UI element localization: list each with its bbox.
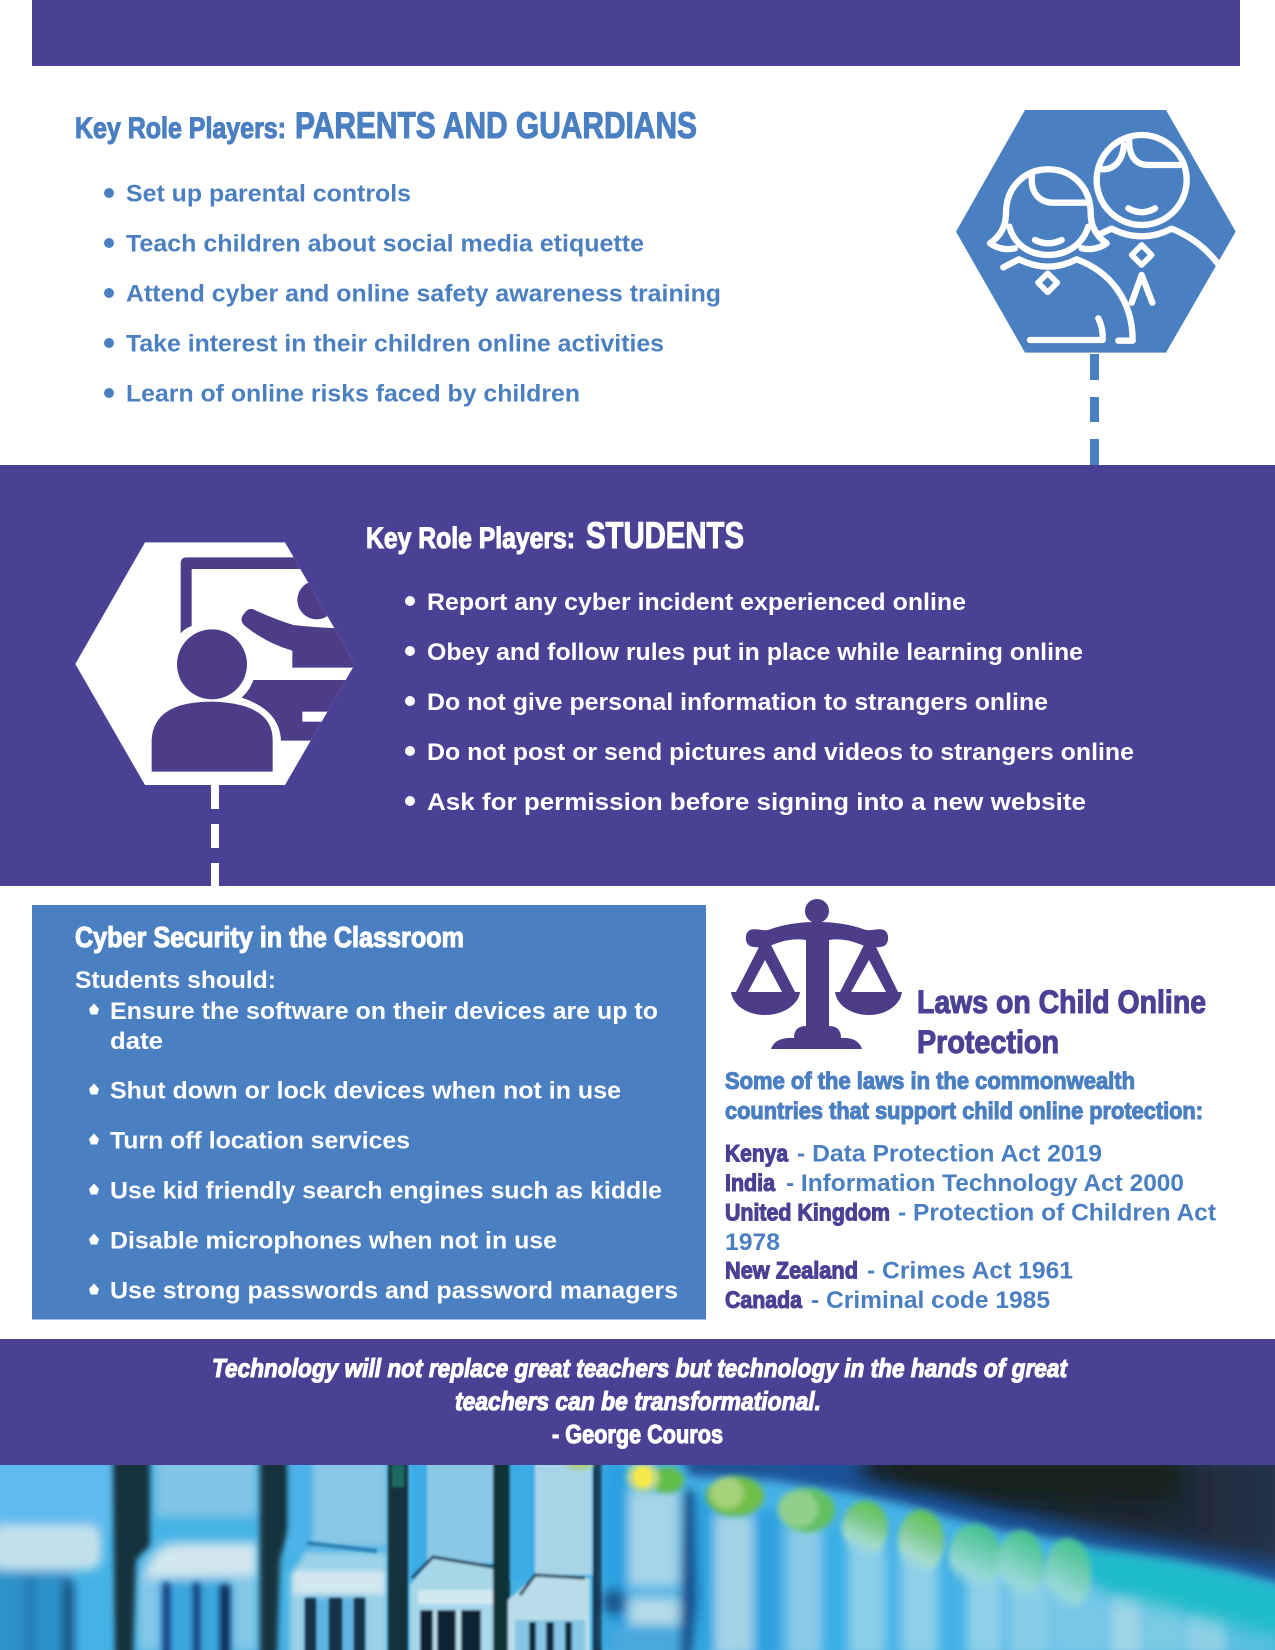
dark separator 4 <box>493 1455 510 1650</box>
green lights <box>566 1457 1091 1610</box>
list: parents and guardians actions: Attend cyber and online safety awareness training <box>126 280 721 308</box>
list: laws by country: New Zealand <box>725 1258 858 1284</box>
text: laws intro <box>725 1068 1203 1125</box>
right-hand columns <box>603 1460 627 1650</box>
dark separator 3 <box>388 1455 408 1650</box>
list: laws by country: - Crimes Act 1961 <box>867 1258 1073 1284</box>
heading: parents and guardians <box>75 105 697 146</box>
list: students actions <box>405 589 1134 816</box>
list: laws by country: 1978 <box>725 1229 780 1256</box>
heading: parents and guardians: Key Role Players: <box>75 112 286 145</box>
list: classroom actions: Disable microphones when not in use <box>110 1228 557 1254</box>
text: laws intro: countries that support child online protection: <box>725 1098 1203 1125</box>
panel: cyber security in the classroom <box>32 905 706 1320</box>
top banner <box>32 0 1240 66</box>
panel: students band <box>0 465 1275 886</box>
heading: laws on child online protection: Protection <box>917 1024 1059 1060</box>
dashed connector: parents <box>1090 354 1099 465</box>
column 2 <box>155 1455 258 1517</box>
dark separators left <box>113 1455 150 1650</box>
heading: students: Key Role Players: <box>366 522 575 555</box>
list: students actions: Do not give personal information to strangers online <box>427 689 1048 716</box>
list: laws by country: Canada <box>725 1287 803 1314</box>
heading: students <box>366 515 744 556</box>
list: classroom actions: Turn off location services <box>110 1128 410 1154</box>
quote: George Couros <box>212 1353 1068 1449</box>
list: parents and guardians actions <box>104 180 721 408</box>
list: laws by country <box>725 1140 1216 1314</box>
column 4 <box>412 1455 428 1580</box>
list: classroom actions: Use kid friendly search engines such as kiddle <box>110 1178 662 1204</box>
list: laws by country: - Information Technology Act 2000 <box>786 1170 1184 1197</box>
list: classroom actions <box>89 998 678 1304</box>
list: laws by country: United Kingdom <box>725 1200 890 1226</box>
yellow light <box>634 1467 652 1487</box>
list: laws by country: Kenya <box>725 1140 789 1168</box>
dashed connector: students <box>211 785 219 886</box>
list: parents and guardians actions: Learn of online risks faced by children <box>126 380 580 408</box>
list: classroom actions: Shut down or lock devices when not in use <box>110 1078 621 1104</box>
list: classroom actions: Ensure the software on their devices are up to <box>110 998 658 1025</box>
column 1 <box>0 1455 112 1530</box>
list: laws by country: - Data Protection Act 2019 <box>797 1140 1102 1168</box>
dark corner <box>860 1455 1275 1565</box>
list: parents and guardians actions: Set up parental controls <box>126 180 411 208</box>
column 5 <box>510 1455 536 1580</box>
heading: students: STUDENTS <box>586 515 744 556</box>
heading: laws on child online protection <box>917 984 1206 1060</box>
list: students actions: Do not post or send pictures and videos to strangers online <box>427 739 1134 766</box>
heading: parents and guardians: PARENTS AND GUARDIANS <box>295 105 697 146</box>
navy glow behind lights <box>680 1455 1275 1585</box>
panel: quote band <box>0 1339 1275 1465</box>
teal wash <box>1060 1545 1275 1640</box>
list: students actions: Report any cyber incident experienced online <box>427 589 966 616</box>
icon: student and teacher in hexagon <box>75 542 360 785</box>
list: laws by country: India <box>725 1170 776 1197</box>
quote: George Couros: - George Couros <box>552 1419 723 1449</box>
list: parents and guardians actions: Take interest in their children online activities <box>126 330 664 358</box>
heading: laws on child online protection: Laws on Child Online <box>917 984 1206 1020</box>
list: classroom actions: date <box>110 1028 163 1055</box>
list: classroom actions: Use strong passwords and password managers <box>110 1278 678 1304</box>
list: students actions: Ask for permission before signing into a new website <box>427 789 1086 816</box>
text: students should: Students should: <box>75 967 276 994</box>
icon: scales of justice <box>731 899 902 1049</box>
list: laws by country: - Criminal code 1985 <box>811 1287 1050 1314</box>
list: students actions: Obey and follow rules put in place while learning online <box>427 639 1083 666</box>
list: laws by country: - Protection of Children Act <box>898 1200 1216 1226</box>
icon: parents in hexagon <box>956 110 1236 353</box>
quote: George Couros: Technology will not replace great teachers but technology in the hands of great <box>212 1353 1068 1383</box>
list: parents and guardians actions: Teach children about social media etiquette <box>126 230 644 258</box>
column 3 <box>290 1455 314 1555</box>
photo: blurred server rack with green lights <box>0 1455 1275 1650</box>
text: laws intro: Some of the laws in the commonwealth <box>725 1068 1135 1095</box>
heading: cyber security in the classroom: Cyber Security in the Classroom <box>75 922 464 954</box>
quote: George Couros: teachers can be transformational. <box>455 1386 821 1416</box>
